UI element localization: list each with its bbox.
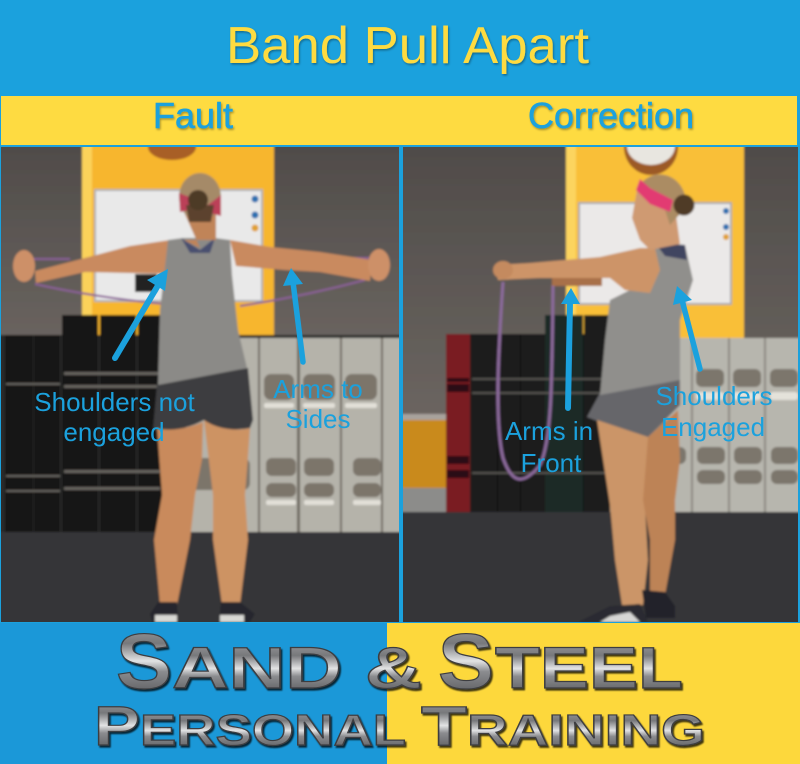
logo: sand and steel: TEEL (495, 636, 683, 701)
logo: personal training: ERSONAL (140, 706, 406, 755)
annotations: correction (505, 286, 773, 478)
label: shoulders engaged: Shoulders (655, 381, 773, 411)
heading: fault: Fault (153, 95, 233, 136)
logo: sand and steel (116, 617, 683, 705)
logo: personal training (94, 694, 705, 757)
logo: sand and steel: AND (172, 636, 342, 701)
band (498, 282, 553, 479)
photo: fault (0, 134, 405, 627)
arrow: shoulders engaged (673, 286, 700, 369)
logo: personal training: T (421, 694, 467, 757)
label: shoulders not engaged: engaged (63, 417, 165, 447)
band (33, 258, 372, 306)
arrow: arms in front (561, 288, 580, 408)
arrow: shoulders not engaged (115, 269, 168, 358)
logo: personal training: P (94, 694, 140, 757)
arrow: arms to sides (283, 268, 303, 362)
title banner (1, 1, 799, 94)
title: Band Pull Apart (226, 17, 590, 75)
photo: correction (398, 119, 800, 627)
logo: sand and steel: S (116, 617, 172, 705)
label: shoulders engaged: Engaged (661, 412, 765, 442)
logo: sand and steel: S (438, 617, 494, 705)
arm (552, 278, 602, 286)
label: arms in front (505, 416, 593, 478)
heading: correction: Correction (528, 95, 694, 136)
logo: personal training: RAINING (467, 706, 705, 755)
footer: logo band (0, 617, 800, 764)
label: arms in front: Arms in (505, 416, 593, 446)
label: arms to sides (273, 374, 363, 434)
label: arms to sides: Arms to (273, 374, 363, 404)
label: arms in front: Front (521, 448, 582, 478)
label: arms to sides: Sides (285, 404, 351, 434)
label: shoulders engaged (655, 381, 773, 442)
label: shoulders not engaged: Shoulders not (34, 387, 195, 417)
label: shoulders not engaged (34, 387, 195, 447)
annotations: fault (34, 268, 363, 447)
logo: sand and steel: & (365, 636, 422, 701)
arms (35, 240, 172, 283)
subheading band (1, 95, 797, 145)
divider (399, 147, 403, 623)
